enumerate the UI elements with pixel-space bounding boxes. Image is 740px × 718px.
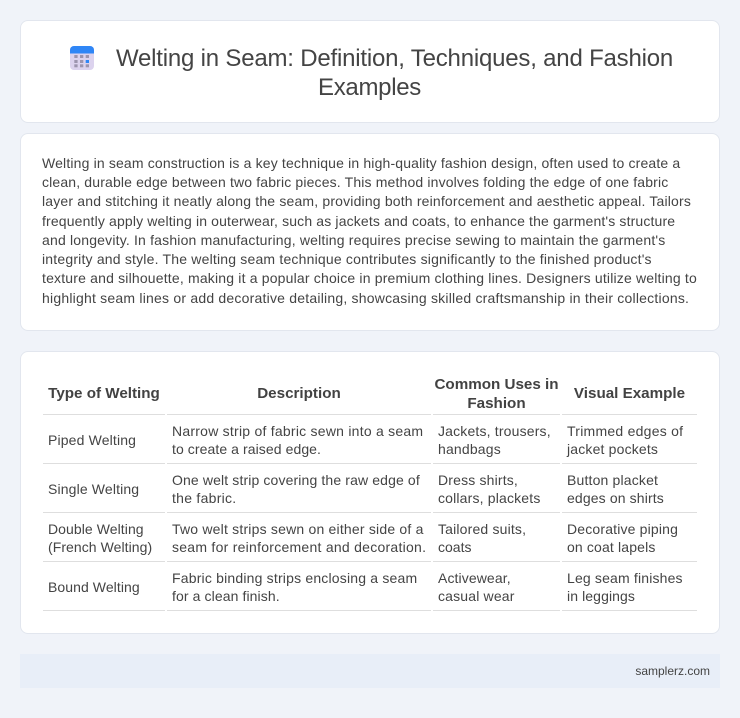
- row: double welting: [48, 521, 678, 555]
- table header: [48, 376, 685, 412]
- table: [43, 376, 697, 611]
- table header: Fashion: [467, 395, 526, 412]
- intro paragraph: frequently apply welting in outerwear, such as jackets and coats, to enhance the garment's structure: [42, 213, 675, 229]
- table header: Description: [257, 385, 341, 402]
- footer credit: samplerz.com: [635, 664, 710, 678]
- icon: calendar grid: [70, 46, 94, 70]
- intro paragraph: highlight seam lines or add decorative detailing, showcasing skilled craftsmanship in their collections.: [42, 290, 689, 306]
- row: bound welting: [48, 570, 683, 604]
- row: single welting: collars, plackets: [438, 490, 540, 506]
- row: piped welting: [48, 423, 684, 457]
- row: single welting: [48, 472, 664, 506]
- row: piped welting: to create a raised edge.: [172, 441, 321, 457]
- row: double welting: (French Welting): [48, 539, 152, 555]
- intro paragraph: texture and silhouette, making it a popular choice in premium clothing lines. Designers utilize welting to: [42, 270, 697, 286]
- table panel: [20, 351, 720, 634]
- intro paragraph: clean, durable edge between two fabric pieces. This method involves folding the edge of one fabric: [42, 174, 668, 190]
- intro paragraph: Welting in seam construction is a key technique in high-quality fashion design, often used to create a: [42, 155, 680, 171]
- row: piped welting: handbags: [438, 441, 501, 457]
- table header: Visual Example: [574, 385, 685, 402]
- row: double welting: coats: [438, 539, 471, 555]
- row: bound welting: Activewear,: [438, 570, 511, 586]
- row: single welting: Dress shirts,: [438, 472, 518, 488]
- row: single welting: One welt strip covering the raw edge of: [172, 472, 420, 488]
- header panel: [20, 20, 720, 123]
- row: bound welting: in leggings: [567, 588, 635, 604]
- intro paragraph: [42, 155, 697, 306]
- row: bound welting: Leg seam finishes: [567, 570, 683, 586]
- table header: Type of Welting: [48, 385, 160, 402]
- row: double welting: Tailored suits,: [438, 521, 526, 537]
- row: double welting: Decorative piping: [567, 521, 678, 537]
- row: piped welting: Jackets, trousers,: [438, 423, 551, 439]
- intro paragraph: integrity and style. The welting seam technique contributes significantly to the finished product's: [42, 251, 652, 267]
- footer bar: [20, 654, 720, 688]
- row: bound welting: for a clean finish.: [172, 588, 280, 604]
- intro paragraph: and longevity. In fashion manufacturing, welting requires precise sewing to maintain the garment's: [42, 232, 665, 248]
- intro paragraph: layer and stitching it neatly along the seam, providing both reinforcement and aesthetic appeal. Tailors: [42, 193, 691, 209]
- row: double welting: on coat lapels: [567, 539, 656, 555]
- row: double welting: Double Welting: [48, 521, 144, 537]
- row: bound welting: Fabric binding strips enclosing a seam: [172, 570, 417, 586]
- title: Examples: [318, 74, 421, 101]
- row: bound welting: casual wear: [438, 588, 515, 604]
- row: single welting: Single Welting: [48, 481, 139, 497]
- row: piped welting: Piped Welting: [48, 432, 136, 448]
- title: [116, 45, 673, 101]
- intro text panel: [20, 133, 720, 331]
- table header: Common Uses in: [434, 376, 559, 393]
- row: double welting: seam for reinforcement and decoration.: [172, 539, 426, 555]
- row: single welting: Button placket: [567, 472, 658, 488]
- row: single welting: the fabric.: [172, 490, 236, 506]
- row: piped welting: Narrow strip of fabric sewn into a seam: [172, 423, 423, 439]
- title: Welting in Seam: Definition, Techniques, and Fashion: [116, 45, 673, 72]
- row: double welting: Two welt strips sewn on either side of a: [172, 521, 424, 537]
- row: bound welting: Bound Welting: [48, 579, 140, 595]
- row: piped welting: Trimmed edges of: [567, 423, 683, 439]
- row: piped welting: jacket pockets: [567, 441, 658, 457]
- row: single welting: edges on shirts: [567, 490, 664, 506]
